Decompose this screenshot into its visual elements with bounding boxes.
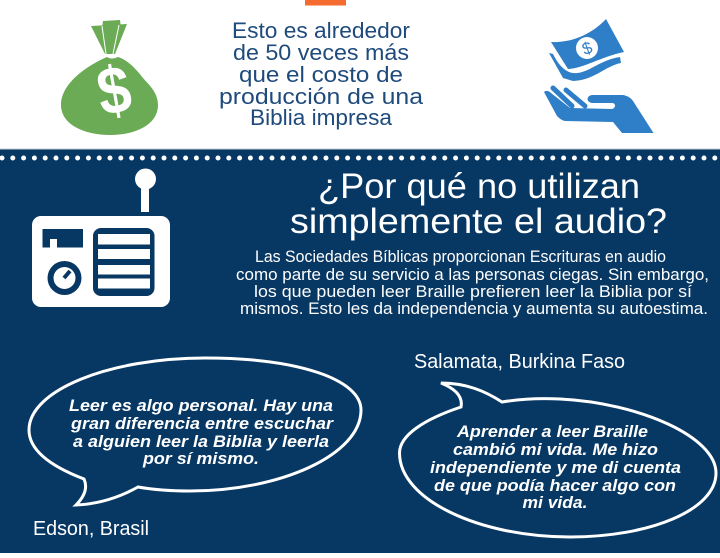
- text: cost comparison: Biblia impresa: [250, 105, 392, 130]
- quote: Salamata: [430, 422, 681, 512]
- quote: Salamata: cambió mi vida. Me hizo: [453, 440, 658, 459]
- speech bubble: Salamata: [400, 383, 716, 537]
- quote: Edson: a alguien leer la Biblia y leerla: [73, 432, 329, 451]
- text: cost comparison: [219, 18, 424, 130]
- quote: Salamata: independiente y me di cuenta: [430, 458, 681, 477]
- speech bubble: Edson: [29, 358, 361, 505]
- quote: Salamata: mi vida.: [522, 493, 588, 512]
- icon: hand receiving money: [544, 19, 654, 133]
- quote: Edson: Leer es algo personal. Hay una: [69, 396, 333, 415]
- text: explanation: mismos. Esto les da independencia y aumenta su autoestima.: [240, 299, 708, 318]
- text: cost comparison: producción de una: [219, 84, 424, 109]
- quote: Edson: por sí mismo.: [142, 449, 259, 468]
- quote: Edson: gran diferencia entre escuchar: [70, 414, 334, 433]
- icon: radio: [32, 168, 170, 307]
- quote: Salamata: de que podía hacer algo con: [434, 476, 676, 495]
- quote: Salamata: Aprender a leer Braille: [456, 422, 648, 441]
- text: explanation: los que pueden leer Braille prefieren leer la Biblia por sí: [254, 282, 692, 301]
- heading: ¿Por qué no utilizan: [318, 167, 640, 206]
- quote: Edson: [69, 396, 334, 468]
- text: explanation: Las Sociedades Bíblicas proporcionan Escrituras en audio: [255, 247, 666, 266]
- icon: money bag: $: [92, 52, 137, 130]
- text: explanation: [236, 247, 709, 318]
- orange top tab: [305, 0, 346, 6]
- text: cost comparison: que el costo de: [239, 62, 403, 87]
- text: cost comparison: de 50 veces más: [233, 40, 409, 65]
- text: explanation: como parte de su servicio a las personas ciegas. Sin embargo,: [236, 265, 709, 284]
- panel: audio question: [0, 148, 720, 553]
- icon: money bag: [61, 20, 158, 135]
- icon: hand receiving money: $: [579, 38, 595, 59]
- name: Edson: Edson, Brasil: [33, 518, 149, 540]
- name: Salamata: Salamata, Burkina Faso: [414, 351, 625, 373]
- heading: simplemente el audio?: [290, 202, 667, 241]
- heading: [290, 167, 667, 241]
- text: cost comparison: Esto es alrededor: [232, 18, 411, 43]
